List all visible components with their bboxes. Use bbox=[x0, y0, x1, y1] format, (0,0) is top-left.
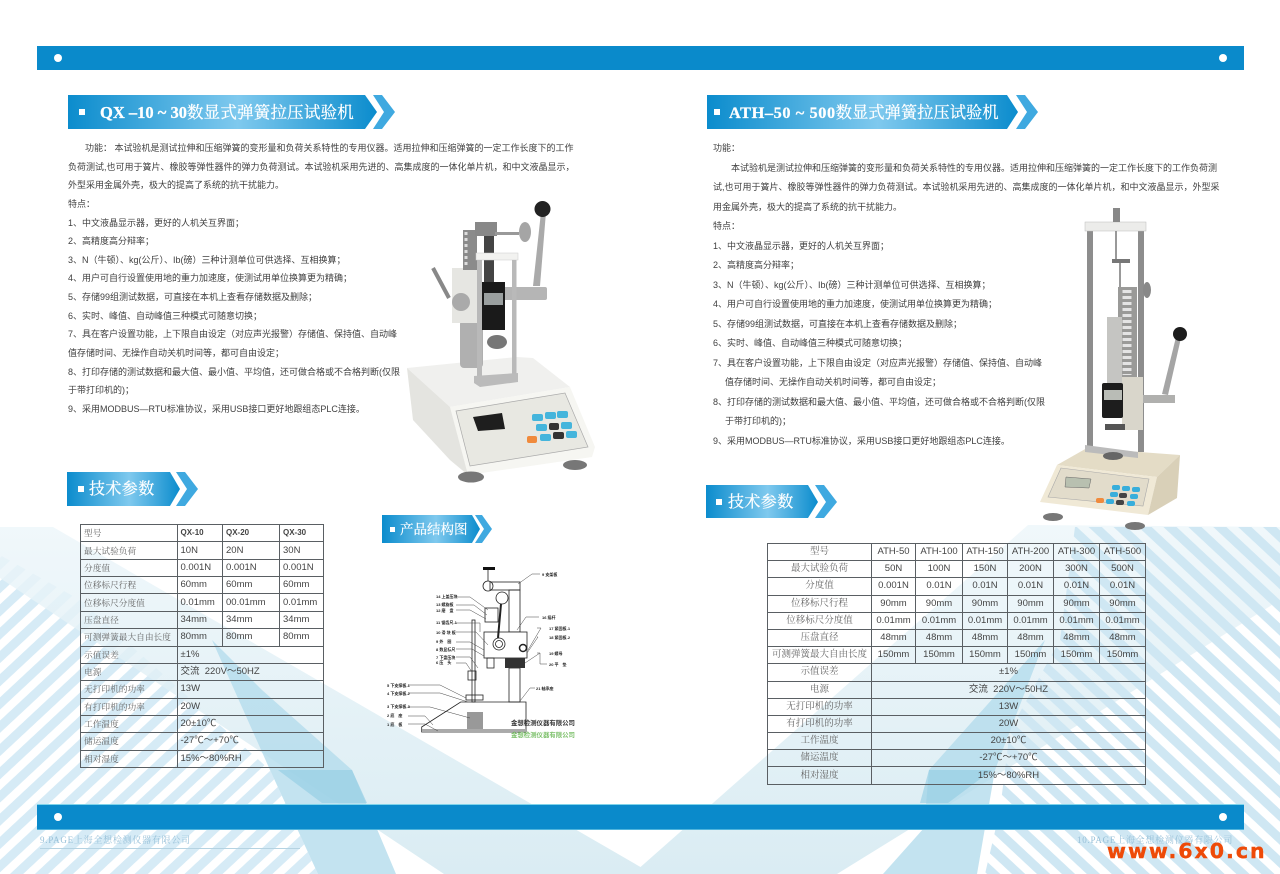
diagram: product structure schematic: 4 下支撑板-2 bbox=[387, 690, 411, 696]
table: QX specs: 80mm bbox=[226, 631, 252, 642]
left description text: 3、N（牛顿）、kg(公斤）、Ib(磅）三种计测单位可供选择、互相换算； bbox=[68, 255, 346, 265]
diagram: product structure schematic: 19 螺母 bbox=[549, 650, 563, 656]
table: ATH specs: 示值误差 bbox=[800, 667, 838, 677]
diagram: product structure schematic: 13 螺旋板 bbox=[436, 601, 454, 607]
right description text: 功能： bbox=[713, 143, 740, 153]
table: ATH specs: 150mm bbox=[969, 649, 1001, 660]
diagram: product structure schematic: 2 底 座 bbox=[387, 712, 402, 718]
table: QX specs: 10N bbox=[180, 545, 198, 556]
watermark: www.6x0.cn bbox=[1107, 839, 1267, 863]
banner: left technical parameters bbox=[67, 472, 198, 506]
table: ATH specs: 位移标尺分度值 bbox=[786, 616, 853, 626]
table: ATH specs: 无打印机的功率 bbox=[786, 702, 853, 712]
diagram: product structure schematic: 9 支架板 bbox=[542, 571, 557, 577]
table: ATH specs: 位移标尺行程 bbox=[791, 599, 848, 609]
left description text: 功能： 本试验机是测试拉伸和压缩弹簧的变形量和负荷关系特性的专用仪器。适用拉伸和压缩弹簧的一定工作长度下的工作 bbox=[85, 143, 574, 153]
table: ATH specs: 0.01mm bbox=[1105, 615, 1140, 626]
table: ATH specs: 最大试验负荷 bbox=[791, 564, 848, 574]
footer: page 9 bbox=[40, 833, 300, 849]
table: QX specs: QX-20 bbox=[226, 528, 249, 537]
table: QX specs bbox=[80, 524, 324, 768]
left description text: 6、实时、峰值、自动峰值三种模式可随意切换； bbox=[68, 311, 262, 321]
table: ATH specs: 150N bbox=[974, 563, 996, 574]
table: ATH specs: 0.01N bbox=[926, 580, 952, 591]
table: QX specs: 工作温度 bbox=[84, 719, 119, 729]
table: ATH specs: 型号 bbox=[810, 547, 829, 557]
right description text: 9、采用MODBUS—RTU标准协议，采用USB接口更好地跟组态PLC连接。 bbox=[713, 436, 1010, 446]
table: ATH specs: 150mm bbox=[1107, 649, 1138, 660]
left description text: 外型采用金属外壳，极大的提高了系统的抗干扰能力。 bbox=[68, 180, 284, 190]
table: ATH specs: 100N bbox=[928, 563, 950, 574]
table: ATH specs: 0.01mm bbox=[1013, 615, 1048, 626]
left description text: 值存储时间、无操作自动关机时间等，都可自由设定； bbox=[68, 348, 284, 358]
table: QX specs: ±1% bbox=[180, 649, 199, 660]
table: ATH specs: ATH-50 bbox=[877, 546, 910, 557]
table: ATH specs: 20W bbox=[999, 718, 1018, 729]
table: QX specs: 电源 bbox=[84, 667, 101, 677]
right description text: 6、实时、峰值、自动峰值三种模式可随意切换； bbox=[713, 338, 907, 348]
table: QX specs: 34mm bbox=[180, 614, 207, 625]
right description text: 3、N（牛顿）、kg(公斤）、Ib(磅）三种计测单位可供选择、互相换算； bbox=[713, 280, 991, 290]
table: QX specs: 0.001N bbox=[226, 562, 257, 573]
table: ATH specs: 90mm bbox=[926, 598, 952, 609]
table: ATH specs: 0.01mm bbox=[968, 615, 1002, 626]
table: ATH specs: 0.01N bbox=[1110, 580, 1135, 591]
right description text: 本试验机是测试拉伸和压缩弹簧的变形量和负荷关系特性的专用仪器。适用拉伸和压缩弹簧的一定工作长度下的工作负荷测 bbox=[731, 162, 1217, 172]
table: ATH specs: 90mm bbox=[880, 598, 907, 609]
table: QX specs: -27℃～+70℃ bbox=[180, 735, 239, 746]
diagram: product structure schematic: 9 外 圈 bbox=[436, 638, 451, 644]
table: ATH specs: 储运温度 bbox=[800, 753, 838, 763]
left description text: 4、用户可自行设置使用地的重力加速度，使测试用单位换算更为精确； bbox=[68, 273, 352, 283]
table: ATH specs: 相对湿度 bbox=[800, 771, 838, 781]
table: ATH specs: 150mm bbox=[1015, 649, 1046, 660]
diagram: product structure schematic: 21 轴承座 bbox=[536, 685, 554, 691]
table: QX specs: 60mm bbox=[180, 579, 207, 590]
table: QX specs: 压盘直径 bbox=[84, 615, 119, 625]
left description text: 负荷测试,也可用于簧片、橡胶等弹性器件的弹力负荷测试。本试验机采用先进的、高集成度的一体化单片机，和中文液晶显示， bbox=[68, 162, 575, 172]
table: QX specs: 0.001N bbox=[180, 562, 211, 573]
table: ATH specs: 工作温度 bbox=[800, 736, 838, 746]
diagram: product structure schematic: 3 下支撑板-3 bbox=[387, 703, 411, 709]
table: QX specs: 20W bbox=[180, 701, 200, 712]
footer: page 9: 9.PAGE上海全想检测仪器有限公司 bbox=[40, 835, 191, 845]
table: ATH specs: 90mm bbox=[1017, 598, 1044, 609]
banner: right technical parameters: 技术参数 bbox=[728, 493, 794, 511]
table: ATH specs: 48mm bbox=[1017, 632, 1044, 643]
diagram: product structure schematic: 18 紧固板-2 bbox=[549, 634, 571, 640]
right description text: 2、高精度高分辩率； bbox=[713, 260, 799, 270]
table: ATH specs: 150mm bbox=[1061, 649, 1092, 660]
table: ATH specs: 90mm bbox=[1063, 598, 1090, 609]
table: QX specs: 分度值 bbox=[84, 563, 110, 573]
table: ATH specs: 分度值 bbox=[805, 581, 834, 591]
banner: product structure diagram: 产品结构图 bbox=[400, 521, 468, 537]
table: ATH specs: 0.01N bbox=[1064, 580, 1089, 591]
table: ATH specs: ATH-300 bbox=[1058, 546, 1095, 557]
table: QX specs: 储运温度 bbox=[84, 736, 119, 746]
right description text: 1、中文液晶显示器，更好的人机关互界面； bbox=[713, 240, 889, 250]
table: QX specs: 13W bbox=[180, 683, 200, 694]
table: ATH specs: 200N bbox=[1019, 563, 1042, 574]
table: ATH specs: 48mm bbox=[972, 632, 998, 643]
left description text: 5、存储99组测试数据，可直接在本机上查看存储数据及删除； bbox=[68, 292, 317, 302]
table: QX specs: 15%～80%RH bbox=[180, 753, 242, 764]
table: QX specs: 交流 220V～50HZ bbox=[180, 666, 260, 677]
diagram: product structure schematic: 11 锯齿尺-1 bbox=[436, 619, 458, 625]
table: QX specs: 60mm bbox=[226, 579, 252, 590]
table: QX specs: 34mm bbox=[283, 614, 309, 625]
table: ATH specs: ATH-100 bbox=[920, 546, 958, 557]
left description text: 8、打印存储的测试数据和最大值、最小值、平均值，还可做合格或不合格判断(仅限 bbox=[68, 367, 400, 377]
table: QX specs: 80mm bbox=[180, 631, 207, 642]
banner: right technical parameters bbox=[706, 485, 837, 518]
table: ATH specs: 48mm bbox=[1109, 632, 1136, 643]
table: ATH specs: 0.001N bbox=[878, 580, 909, 591]
left description text: 于带打印机的)； bbox=[68, 385, 134, 395]
right description text: 8、打印存储的测试数据和最大值、最小值、平均值，还可做合格或不合格判断(仅限 bbox=[713, 396, 1045, 406]
table: ATH specs: 13W bbox=[999, 701, 1018, 712]
table: QX specs: 60mm bbox=[283, 579, 309, 590]
table: ATH specs: 150mm bbox=[923, 649, 955, 660]
table: QX specs: QX-30 bbox=[283, 528, 306, 537]
table: ATH specs: -27℃～+70℃ bbox=[979, 752, 1038, 763]
table: ATH specs: 500N bbox=[1111, 563, 1134, 574]
table: ATH specs: 20±10℃ bbox=[991, 735, 1026, 746]
left description text: 1、中文液晶显示器，更好的人机关互界面； bbox=[68, 218, 244, 228]
left description text bbox=[68, 143, 575, 414]
table: QX specs: 型号 bbox=[84, 528, 101, 538]
table: ATH specs: 90mm bbox=[1109, 598, 1136, 609]
diagram: product structure schematic: 7 下盘压块 bbox=[436, 654, 455, 660]
table: ATH specs: 有打印机的功率 bbox=[786, 719, 853, 729]
bottom blue bar bbox=[37, 805, 1244, 829]
banner: product structure diagram bbox=[382, 515, 492, 543]
diagram: product structure schematic: 17 紧固板-1 bbox=[549, 625, 571, 631]
table: ATH specs: ATH-150 bbox=[966, 546, 1004, 557]
table: QX specs: QX-10 bbox=[180, 528, 204, 537]
table: ATH specs: ±1% bbox=[999, 666, 1018, 677]
table: QX specs: 示值误差 bbox=[84, 650, 119, 660]
right description text: 5、存储99组测试数据，可直接在本机上查看存储数据及删除； bbox=[713, 318, 962, 328]
table: ATH specs: 150mm bbox=[878, 649, 909, 660]
table: QX specs: 00.01mm bbox=[226, 597, 266, 608]
diagram: product structure schematic: 20 平 垫 bbox=[549, 661, 567, 667]
left description text: 7、具在客户设置功能，上下限自由设定（对应声光报警）存储值、保持值、自动峰 bbox=[68, 329, 397, 339]
diagram: product structure schematic: 14 上盖压块 bbox=[436, 593, 458, 599]
footer: page 10: 10.PAGE上海全想检测仪器有限公司 bbox=[1077, 835, 1233, 845]
table: QX specs: 34mm bbox=[226, 614, 252, 625]
banner: left technical parameters: 技术参数 bbox=[89, 480, 155, 498]
right description text: 特点： bbox=[713, 221, 740, 231]
diagram: product structure schematic: 6 压 头 bbox=[436, 659, 451, 665]
diagram: product structure schematic: 金想检测仪器有限公司 bbox=[511, 718, 575, 727]
table: ATH specs: 电源 bbox=[810, 685, 829, 695]
table: ATH specs: 交流 220V～50HZ bbox=[969, 684, 1048, 695]
left description text: 9、采用MODBUS—RTU标准协议，采用USB接口更好地跟组态PLC连接。 bbox=[68, 404, 365, 414]
diagram: product structure schematic: 16 摇杆 bbox=[542, 614, 556, 620]
right description text: 用金属外壳，极大的提高了系统的抗干扰能力。 bbox=[713, 202, 902, 212]
right description text: 7、具在客户设置功能，上下限自由设定（对应声光报警）存储值、保持值、自动峰 bbox=[713, 358, 1042, 368]
diagram: product structure schematic: 10 滑 块 板 bbox=[436, 629, 456, 635]
table: QX specs: 80mm bbox=[283, 631, 309, 642]
diagram: product structure schematic: 12 磨 盘 bbox=[436, 607, 454, 613]
right description text: 试,也可用于簧片、橡胶等弹性器件的弹力负荷测试。本试验机采用先进的、高集成度的一体化单片机，和中文液晶显示，外型采 bbox=[713, 182, 1220, 192]
banner: ATH-50~500 title: ATH–50 ~ 500数显式弹簧拉压试验机 bbox=[729, 103, 999, 122]
table: QX specs: 20N bbox=[226, 545, 243, 556]
right description text bbox=[713, 143, 1220, 446]
left description text: 特点： bbox=[68, 199, 95, 209]
right description text: 4、用户可自行设置使用地的重力加速度，使测试用单位换算更为精确； bbox=[713, 299, 997, 309]
banner: QX-10~30 title bbox=[68, 95, 395, 129]
table: QX specs: 30N bbox=[283, 545, 300, 556]
right description text: 于带打印机的)； bbox=[725, 416, 791, 426]
table: ATH specs: 0.01mm bbox=[876, 615, 911, 626]
table: ATH specs: 48mm bbox=[1063, 632, 1090, 643]
table: QX specs: 0.001N bbox=[283, 562, 314, 573]
table: QX specs: 最大试验负荷 bbox=[84, 546, 136, 556]
diagram: product structure schematic: 1 底 板 bbox=[387, 721, 402, 727]
table: QX specs: 位移标尺分度值 bbox=[84, 598, 145, 608]
diagram: product structure schematic: 8 数显标尺 bbox=[436, 646, 455, 652]
left description text: 2、高精度高分辩率； bbox=[68, 236, 154, 246]
table: ATH specs: 压盘直径 bbox=[800, 633, 838, 643]
top blue bar bbox=[37, 46, 1244, 70]
table: QX specs: 0.01mm bbox=[283, 597, 317, 608]
table: ATH specs: 300N bbox=[1065, 563, 1088, 574]
table: QX specs: 无打印机的功率 bbox=[84, 684, 145, 694]
table: QX specs: 有打印机的功率 bbox=[84, 702, 145, 712]
diagram: product structure schematic: 5 下支撑板-1 bbox=[387, 682, 411, 688]
table: ATH specs: 90mm bbox=[972, 598, 998, 609]
banner: ATH-50~500 title bbox=[707, 95, 1038, 129]
table: QX specs: 相对湿度 bbox=[84, 754, 119, 764]
table: ATH specs: 0.01N bbox=[972, 580, 998, 591]
table: ATH specs: ATH-200 bbox=[1012, 546, 1049, 557]
table: ATH specs: 15%～80%RH bbox=[978, 770, 1039, 781]
table: QX specs: 0.01mm bbox=[180, 597, 215, 608]
table: ATH specs: 48mm bbox=[926, 632, 952, 643]
table: ATH specs: 0.01N bbox=[1018, 580, 1043, 591]
table: ATH specs: 48mm bbox=[880, 632, 907, 643]
table: ATH specs: 可测弹簧最大自由长度 bbox=[772, 650, 867, 660]
table: ATH specs: 0.01mm bbox=[1059, 615, 1094, 626]
right description text: 值存储时间、无操作自动关机时间等，都可自由设定； bbox=[725, 377, 941, 387]
table: ATH specs: 50N bbox=[885, 563, 902, 574]
diagram: product structure schematic: 金想检测仪器有限公司 bbox=[511, 730, 575, 739]
table: ATH specs: 0.01mm bbox=[922, 615, 956, 626]
table: QX specs: 20±10℃ bbox=[180, 718, 216, 729]
table: QX specs: 可测弹簧最大自由长度 bbox=[84, 632, 171, 642]
banner: QX-10~30 title: QX –10 ~ 30数显式弹簧拉压试验机 bbox=[100, 103, 354, 122]
table: ATH specs bbox=[767, 543, 1146, 785]
table: ATH specs: ATH-500 bbox=[1104, 546, 1141, 557]
table: QX specs: 位移标尺行程 bbox=[84, 580, 136, 590]
